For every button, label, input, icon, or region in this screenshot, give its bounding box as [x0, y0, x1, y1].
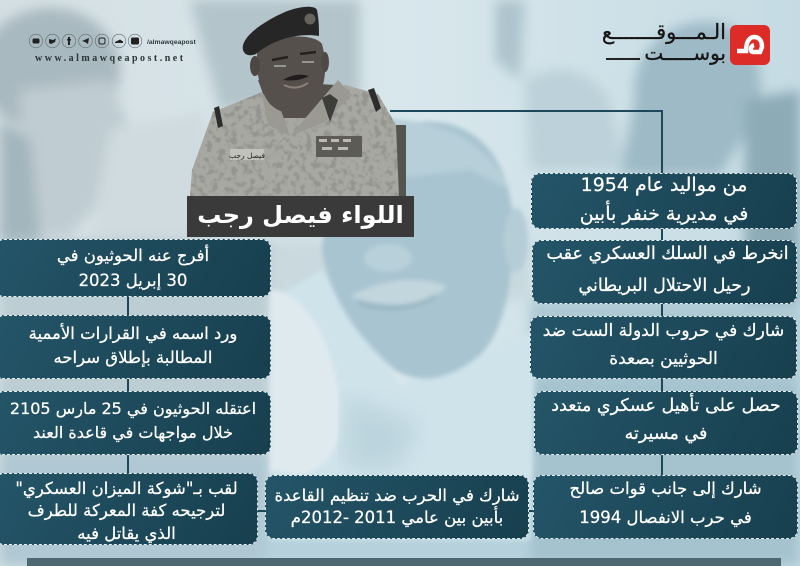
portrait of general: [190, 6, 406, 196]
box: training: في مسيرته: [625, 424, 707, 444]
box: nickname: الذي يقاتل فيه: [77, 524, 176, 543]
beret: [243, 7, 319, 55]
box: al-qaeda war: [265, 475, 529, 539]
box: training: حصل على تأهيل عسكري متعدد: [551, 396, 781, 416]
social icons: /almawqeapost: [147, 39, 196, 46]
box: birth: في مديرية خنفر بأبين: [580, 203, 748, 225]
box: al-qaeda war: بأبين بين عامي 2011 -2012م: [291, 508, 503, 527]
box: UN resolutions: ورد اسمه في القرارات الأممية: [29, 324, 237, 343]
box: nickname: لترجيحه كفة المعركة للطرف: [28, 501, 225, 520]
box: released: 30 إبريل 2023: [79, 271, 187, 290]
bottom bar: [27, 558, 781, 566]
portrait of general: فيصل رجب: [229, 151, 265, 160]
neck: [258, 80, 335, 118]
box: birth: [531, 173, 797, 229]
name banner: [187, 196, 414, 237]
box: nickname: لقب بـ"شوكة الميزان العسكري": [15, 479, 238, 498]
box: six wars: شارك في حروب الدولة الست ضد: [543, 321, 784, 341]
face: [257, 36, 325, 113]
box: 1994 war: [533, 475, 798, 539]
box: detained: خلال مواجهات في قاعدة العند: [33, 423, 233, 442]
collar: [262, 94, 290, 136]
icon: logo mark: [730, 25, 770, 65]
box: al-qaeda war: شارك في الحرب ضد تنظيم القاعدة: [274, 486, 520, 505]
box: detained: اعتقله الحوثيون في 25 مارس 2105: [10, 399, 256, 418]
box: six wars: الحوثيين بصعدة: [609, 349, 718, 369]
box: released: أفرج عنه الحوثيون في: [57, 246, 209, 265]
box: released: [0, 239, 271, 297]
box: six wars: [530, 316, 797, 379]
box: joined military: [532, 240, 797, 304]
uniform: [190, 85, 406, 197]
box: detained: [0, 391, 271, 455]
box: joined military: رحيل الاحتلال البريطاني: [578, 276, 751, 296]
medals: [316, 136, 362, 157]
box: UN resolutions: المطالبة بإطلاق سراحه: [53, 348, 212, 367]
box: 1994 war: في حرب الانفصال 1994: [579, 508, 752, 527]
social icons: [28, 34, 196, 64]
name banner: اللواء فيصل رجب: [197, 201, 404, 229]
social icons: www.almawqeapost.net: [35, 53, 186, 64]
logo wordmark: بوســـــت: [644, 41, 726, 65]
box: nickname: [0, 473, 258, 545]
logo: [602, 20, 770, 65]
box: 1994 war: شارك إلى جانب قوات صالح: [569, 479, 762, 498]
box: joined military: انخرط في السلك العسكري عقب: [546, 244, 789, 264]
logo wordmark: الـمـــوقـــــــع: [602, 20, 726, 44]
box: birth: من مواليد عام 1954: [581, 174, 747, 196]
box: training: [534, 391, 798, 455]
box: UN resolutions: [0, 315, 271, 379]
logo wordmark: [602, 20, 726, 65]
name tag: [230, 149, 264, 160]
